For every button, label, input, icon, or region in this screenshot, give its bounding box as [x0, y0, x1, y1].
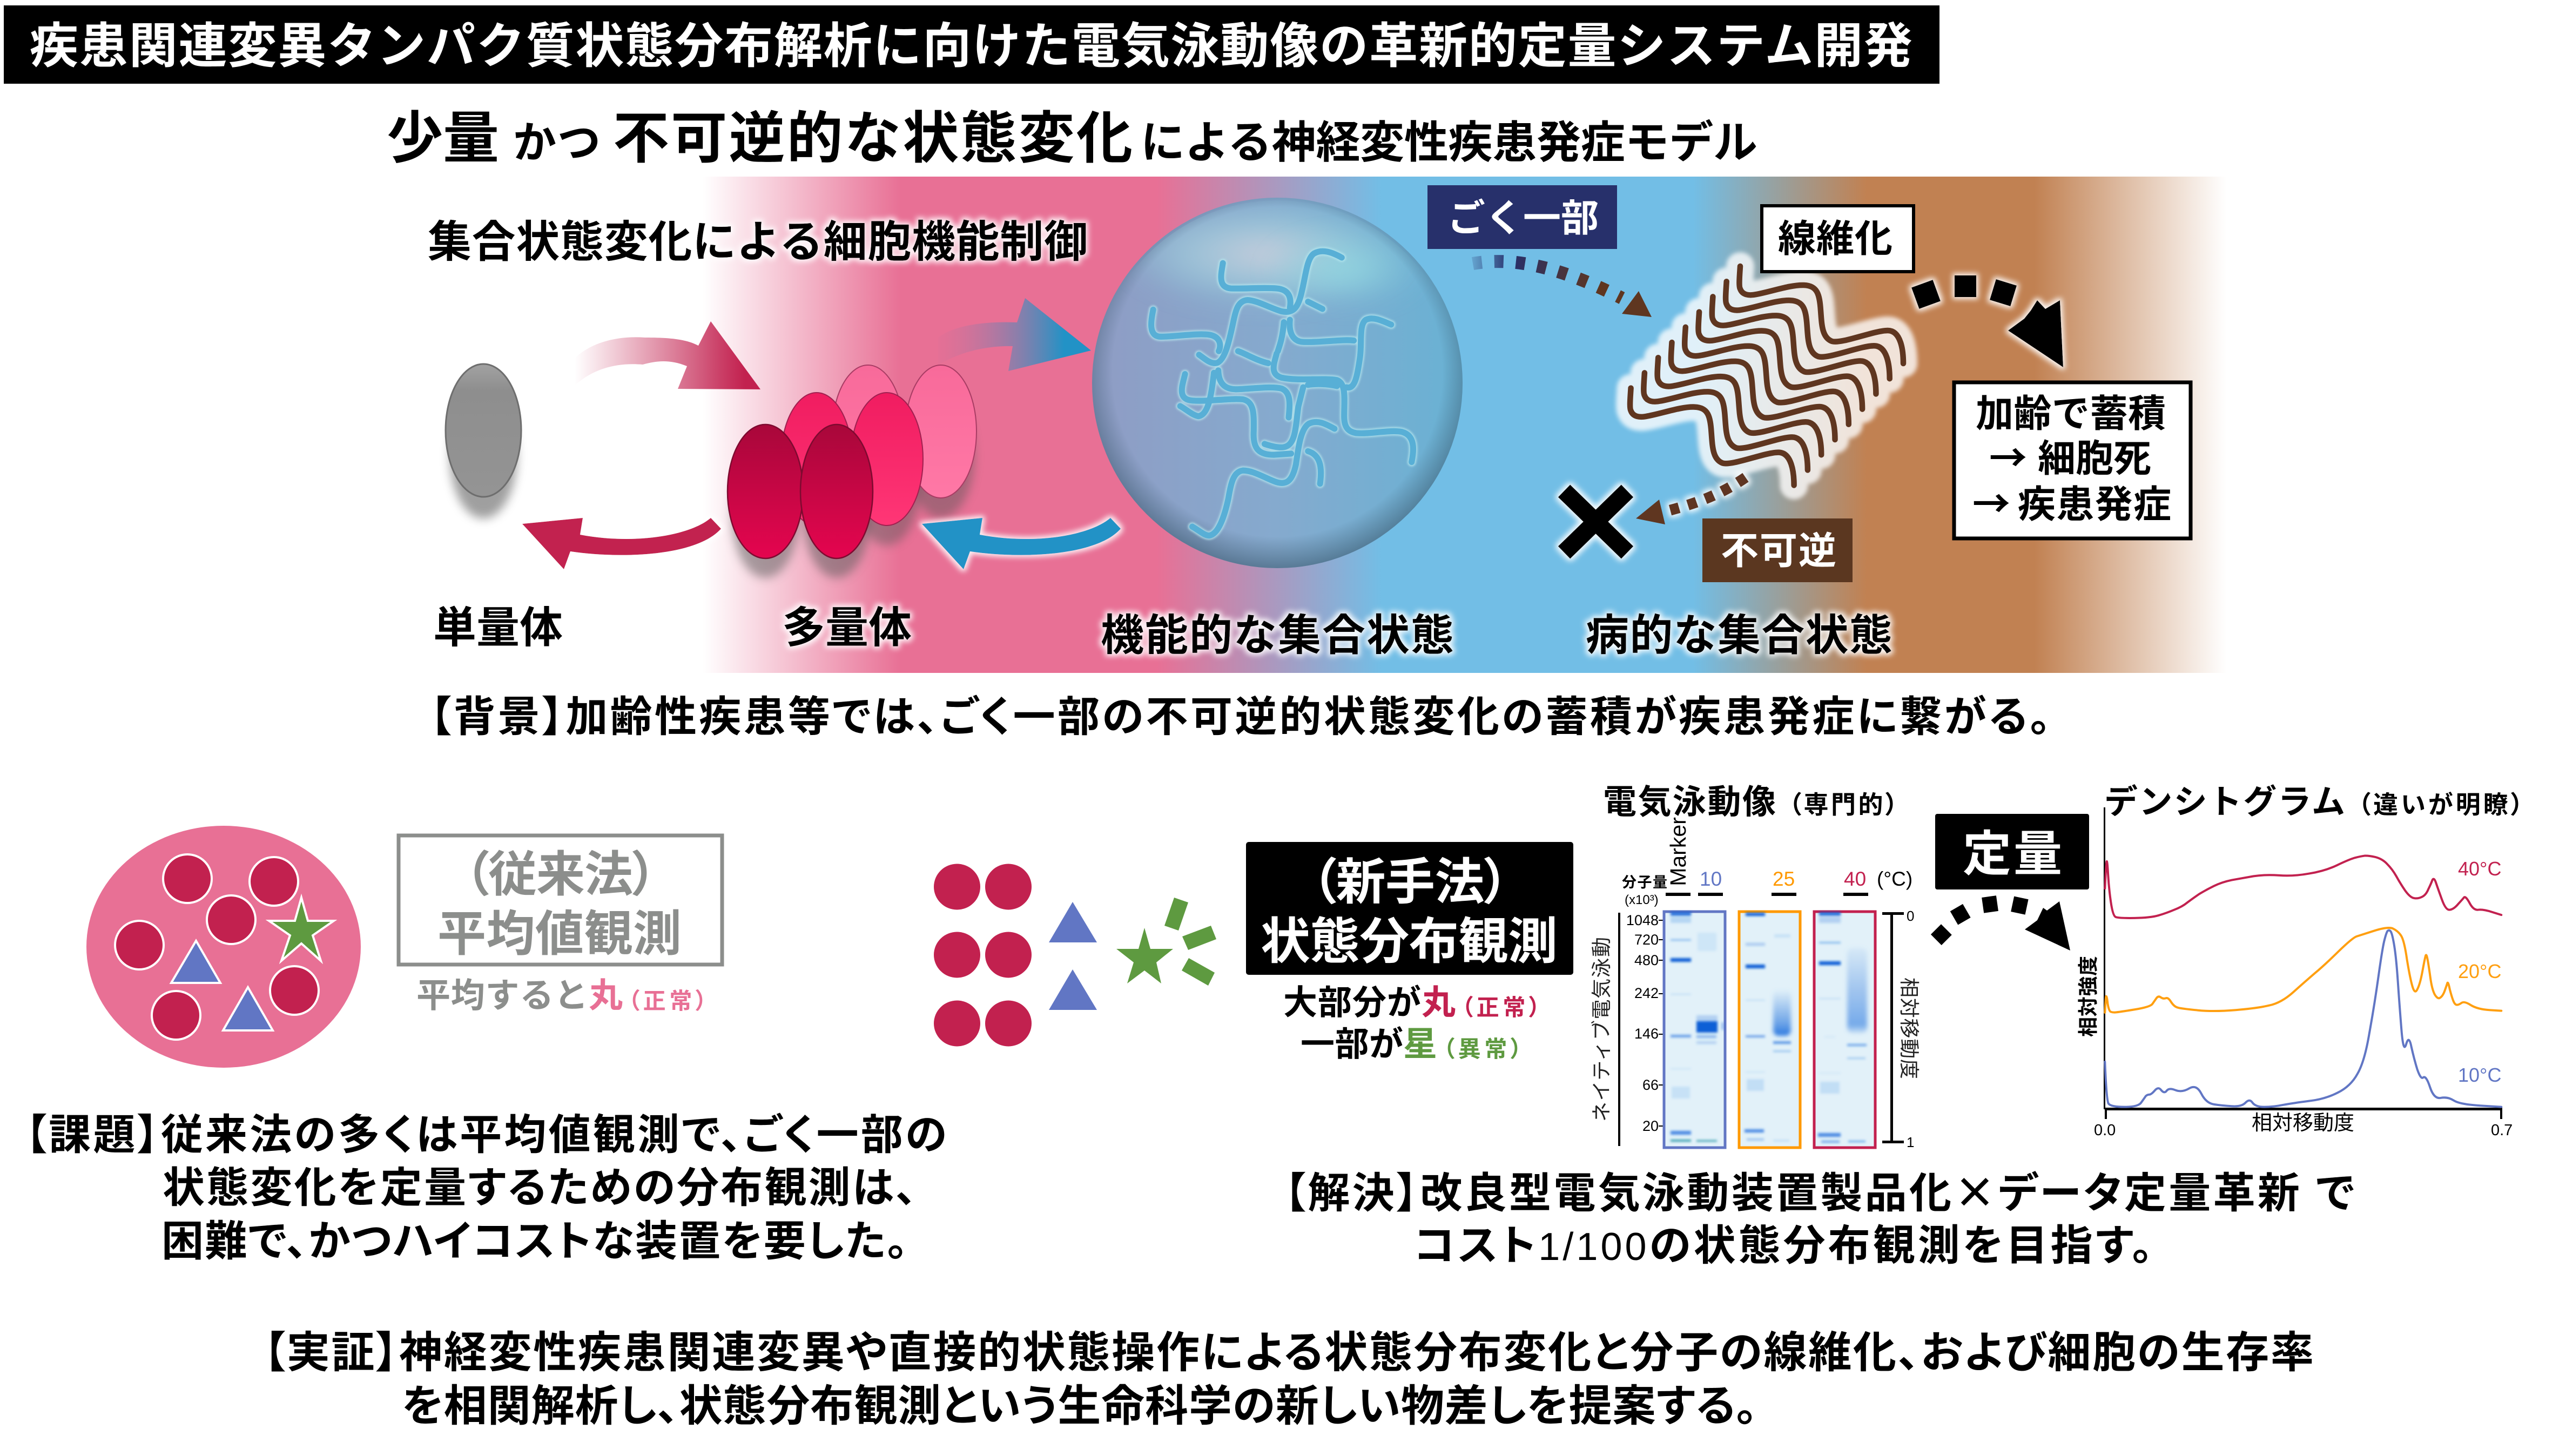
text: distribution result: 大部分が [1283, 984, 1421, 1022]
icon: multimer ellipses [728, 365, 976, 578]
callout: irreversible: 不可逆 [1721, 530, 1836, 572]
callout: accumulation result: → [1972, 474, 2010, 529]
text block: demonstration: を相関解析し、状態分布観測という生命科学の新しい物差しを提案する。 [402, 1382, 1757, 1430]
callout: fibrillization: 線維化 [1778, 218, 1892, 260]
icon: droplet sphere with tangled proteins [1092, 198, 1463, 568]
label: axis ends: 0.7 [2491, 1122, 2513, 1139]
heading: gel image: 電気泳動像 [1603, 784, 1776, 821]
label: temperatures: 10 [1700, 868, 1722, 890]
text block: solution: 【解決】改良型電気泳動装置製品化×データ定量革新 で [1284, 1160, 2354, 1220]
panel: conventional method label: （従来法） [464, 848, 657, 902]
label: monomer: 単量体 [433, 604, 563, 652]
label: curve temperatures: 20°C [2458, 960, 2501, 982]
chart: electrophoresis gel [1591, 817, 1920, 1150]
subtitle heading: 不可逆的な状態変化 [613, 107, 1133, 170]
chart: densitogram [2077, 807, 2513, 1139]
label: curve temperatures: 10°C [2458, 1064, 2501, 1086]
callout: fibrillization [1762, 206, 1914, 272]
text block: solution: コスト1/100の状態分布観測を目指す。 [1414, 1222, 2153, 1269]
curves [2105, 855, 2501, 1107]
label: temperatures [1700, 868, 1912, 890]
label: native electrophoresis: ネイティブ電気泳動 [1591, 937, 1613, 1122]
axis: molecular weight: 20 [1642, 1118, 1659, 1134]
text: distribution result: 一部が [1301, 1026, 1403, 1063]
panel: new method label: 状態分布観測 [1261, 914, 1558, 969]
text block: problem: 困難で、かつハイコストな装置を要した。 [161, 1217, 908, 1265]
callout: accumulation result: → [1989, 428, 2027, 483]
gel lane: 40 C [1814, 912, 1875, 1148]
subtitle heading: による神経変性疾患発症モデル [1141, 118, 1757, 167]
gel lane: 25 C [1739, 912, 1800, 1148]
label: relative mobility: 相対移動度 [2252, 1112, 2354, 1135]
label: multimer: 多量体 [782, 604, 912, 652]
axis: molecular weight: 66 [1642, 1077, 1659, 1093]
panel: new method label [1246, 842, 1573, 975]
title: 疾患関連変異タンパク質状態分布解析に向けた電気泳動像の革新的定量システム開発 [30, 19, 1912, 73]
text block: problem [25, 1111, 947, 1265]
heading: densitogram [2104, 784, 2523, 821]
text: average result: 丸 [589, 977, 623, 1015]
text block: problem: 【課題】従来法の多くは平均値観測で、ごく一部の [25, 1111, 947, 1158]
axis: molecular weight: 480 [1634, 952, 1659, 968]
label: temperatures: 25 [1773, 868, 1795, 890]
text block: solution [1284, 1160, 2354, 1269]
label: axis ends: 0.0 [2094, 1122, 2116, 1139]
panel: conventional method label [399, 835, 722, 965]
axis: relative mobility scale: 0 [1907, 908, 1914, 924]
gel lane: 10 C [1664, 912, 1725, 1148]
text: distribution result: （正常） [1462, 995, 1540, 1020]
callout: accumulation result: 加齢で蓄積 [1976, 393, 2166, 435]
axis: relative mobility scale [1882, 908, 1914, 1150]
label: axis ends [2094, 1122, 2513, 1139]
panel: conventional method label: 平均値観測 [437, 907, 682, 961]
arrow: multimer to functional state [938, 298, 1091, 371]
text: average result: 平均すると [416, 977, 588, 1015]
callout: quantification [1935, 814, 2089, 889]
label: molecular weight: (x10³) [1625, 893, 1659, 907]
icon: wavy fibril [1630, 266, 1903, 486]
heading: densitogram: デンシトグラム [2104, 784, 2345, 821]
axis: relative mobility scale: 1 [1907, 1134, 1914, 1150]
panel: new method label: （新手法） [1311, 855, 1509, 910]
text block: background statement: 【背景】加齢性疾患等では、ごく一部の不可逆的状態変化の蓄積が疾患発症に繋がる。 [430, 693, 2051, 740]
label: relative intensity: 相対強度 [2077, 956, 2099, 1037]
subtitle heading: かつ [513, 119, 601, 167]
subtitle heading: 少量 [387, 107, 499, 170]
label: temperatures: 40 [1844, 868, 1866, 890]
arrow: multimer to monomer [522, 518, 721, 569]
callout: accumulation result: 細胞死 [2038, 437, 2151, 480]
subtitle heading [387, 107, 1757, 170]
text block: demonstration: 【実証】神経変性疾患関連変異や直接的状態操作による状態分布変化と分子の線維化、および細胞の生存率 [264, 1329, 2314, 1377]
arrow: functional state to multimer [922, 518, 1121, 569]
text block: problem: 状態変化を定量するための分布観測は、 [163, 1164, 917, 1211]
callout: quantification: 定量 [1963, 827, 2062, 881]
label: curve temperatures [2458, 858, 2501, 1086]
axis: molecular weight: 1048 [1626, 912, 1659, 928]
heading: gel image: （専門的） [1789, 791, 1898, 819]
icon: monomer ellipse [446, 364, 521, 518]
text block: demonstration [264, 1329, 2314, 1430]
arrow: dotted irreversible [1636, 477, 1746, 524]
label: aggregation control: 集合状態変化による細胞機能制御 [428, 218, 1088, 267]
heading: densitogram: （違いが明瞭） [2358, 791, 2523, 819]
text: average result: （正常） [628, 988, 707, 1014]
text: distribution result: 丸 [1422, 984, 1456, 1022]
axis: molecular weight: 720 [1634, 932, 1659, 948]
arrow: dotted to fibril [1473, 261, 1652, 317]
text: distribution result: 星 [1403, 1026, 1437, 1063]
label: pathological aggregate: 病的な集合状態 [1586, 611, 1892, 659]
label: molecular weight [1622, 874, 1667, 907]
panel: background gradient band [703, 177, 2226, 673]
text: distribution result [1283, 984, 1540, 1063]
callout: accumulation result: 疾患発症 [2018, 483, 2171, 525]
callout: small fraction [1427, 185, 1617, 249]
arrow: dotted to densitogram [1931, 895, 2070, 951]
label: curve temperatures: 40°C [2458, 858, 2501, 880]
panel: conventional method oval [86, 826, 361, 1068]
label: relative mobility vertical: 相対移動度 [1898, 978, 1920, 1079]
text: distribution result: （異常） [1443, 1036, 1522, 1062]
label: functional aggregate: 機能的な集合状態 [1101, 611, 1454, 659]
arrow: monomer to multimer [575, 321, 760, 389]
heading: gel image [1603, 784, 1898, 821]
callout: small fraction: ごく一部 [1447, 197, 1599, 239]
label: marker: Marker [1666, 817, 1691, 886]
label: temperatures: (°C) [1877, 868, 1912, 890]
axis: molecular weight [1618, 912, 1663, 1146]
arrow: black dotted to accumulation [1911, 275, 2063, 367]
callout: accumulation result [1954, 382, 2191, 538]
axis: molecular weight: 242 [1634, 985, 1659, 1001]
axis: molecular weight: 146 [1634, 1026, 1659, 1042]
title [4, 5, 1939, 84]
axes [2104, 807, 2502, 1119]
label: molecular weight: 分子量 [1622, 874, 1667, 891]
text: average result [416, 977, 707, 1015]
callout: irreversible [1702, 518, 1853, 582]
icon: X mark [1564, 491, 1627, 552]
icon group: separated molecules [934, 864, 1216, 1047]
